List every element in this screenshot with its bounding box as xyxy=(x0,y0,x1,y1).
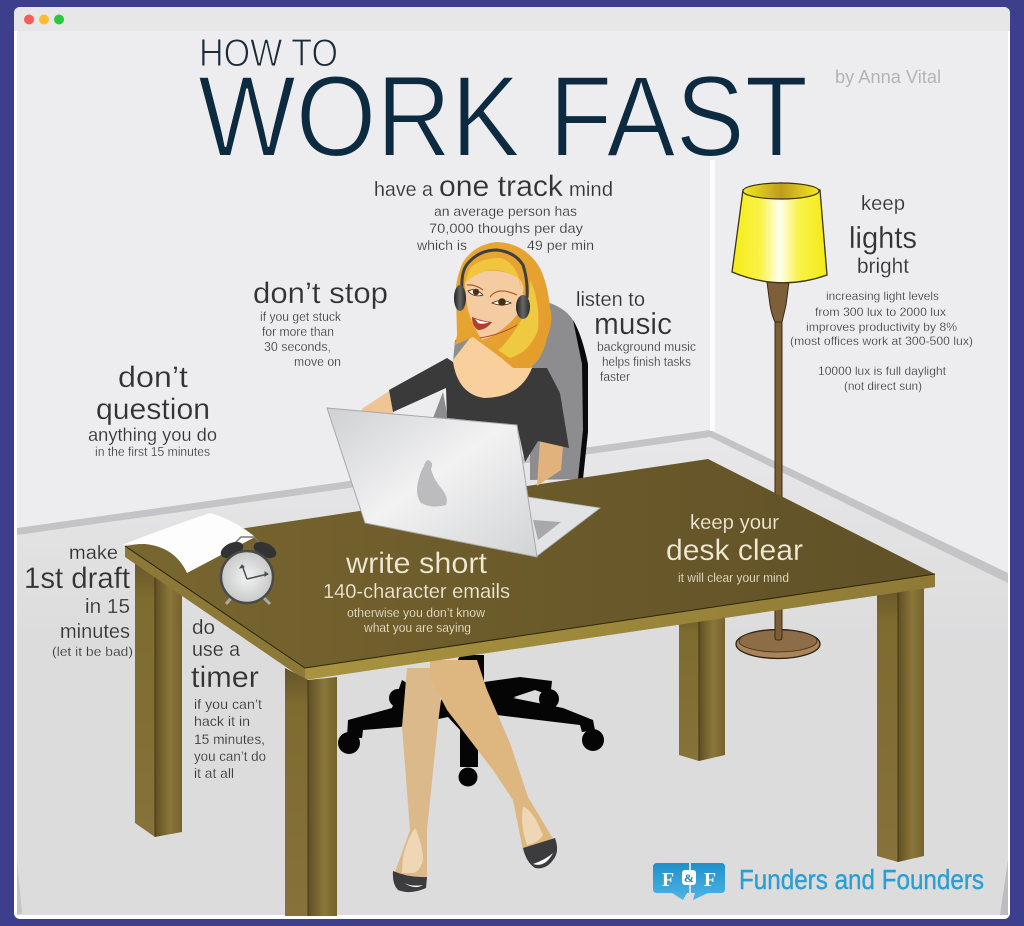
person: fringe xyxy=(465,258,522,292)
person: hair back xyxy=(455,242,551,368)
text block: one track mind: an average person has xyxy=(434,204,577,219)
text block: don't stop: don’t stop xyxy=(253,277,388,310)
window buttons xyxy=(24,14,64,24)
office chair: wheel base xyxy=(338,655,604,786)
person: chest and neck xyxy=(453,322,533,398)
text block: listen to music xyxy=(576,289,696,384)
text block: listen to music: faster xyxy=(600,370,630,384)
text block: don't stop: if you get stuck xyxy=(260,310,342,324)
text block: use a timer: 15 minutes, xyxy=(194,731,265,747)
text block: keep lights bright: from 300 lux to 2000 lux xyxy=(815,305,946,319)
text block: don't question: don’t xyxy=(118,361,189,394)
paper stack xyxy=(122,513,255,573)
text block: make 1st draft: in 15 xyxy=(85,596,130,618)
text block: one track mind: 49 per min xyxy=(527,238,594,253)
text block: make 1st draft xyxy=(24,543,133,659)
text block: keep your desk clear: keep your xyxy=(690,512,779,534)
text block: write short: what you are saying xyxy=(363,620,471,635)
room: walls and floor xyxy=(17,160,1008,915)
text block: one track mind: one track xyxy=(439,170,564,203)
floor lamp xyxy=(732,183,827,658)
office chair: backrest xyxy=(433,303,588,480)
text block: one track mind xyxy=(374,170,613,253)
alarm clock xyxy=(218,537,279,604)
person: eyes and brows xyxy=(467,285,517,306)
text block: write short: 140-character emails xyxy=(323,581,510,603)
text block: make 1st draft: 1st draft xyxy=(24,562,131,595)
text block: keep lights bright: increasing light levels xyxy=(826,289,939,303)
text block: keep lights bright: (not direct sun) xyxy=(844,379,922,393)
text block: listen to music: background music xyxy=(597,340,696,354)
text block: keep lights bright xyxy=(790,193,973,393)
logo: Funders and Founders: Funders and Founders xyxy=(739,864,984,895)
text block: don't question: anything you do xyxy=(88,425,217,445)
text block: don't stop: move on xyxy=(294,355,341,369)
table: top surface xyxy=(125,459,935,668)
text block: don't question xyxy=(88,361,217,459)
text block: use a timer: hack it in xyxy=(194,713,250,729)
text block: write short: otherwise you don’t know xyxy=(347,605,486,620)
text block: keep lights bright: lights xyxy=(849,220,917,255)
text block: keep lights bright: keep xyxy=(861,193,905,215)
logo: Funders and Founders: F xyxy=(704,869,716,891)
table: front leg xyxy=(285,668,337,916)
text block: write short: write short xyxy=(345,547,488,580)
text block: one track mind: have a xyxy=(374,179,434,201)
person: face xyxy=(465,271,523,340)
text block: listen to music: helps finish tasks xyxy=(602,355,691,369)
text block: don't stop xyxy=(253,277,388,369)
text block: one track mind: which is xyxy=(416,238,467,253)
person: headset xyxy=(454,250,530,319)
table: right leg xyxy=(877,580,924,862)
logo: Funders and Founders: F xyxy=(662,869,674,891)
byline: by Anna Vital xyxy=(835,67,941,87)
person: legs xyxy=(395,660,555,880)
text block: don't stop: for more than xyxy=(262,325,334,339)
laptop xyxy=(327,408,600,557)
text block: write short xyxy=(323,547,510,635)
text block: don't stop: 30 seconds, xyxy=(264,340,331,354)
text block: keep your desk clear: desk clear xyxy=(666,534,803,567)
text block: keep lights bright: 10000 lux is full daylight xyxy=(818,364,947,378)
table: edges xyxy=(125,546,935,680)
logo: Funders and Founders xyxy=(653,863,984,900)
table: left leg xyxy=(135,555,182,837)
text block: use a timer: use a xyxy=(192,639,241,661)
person: arms xyxy=(360,391,563,486)
text block: listen to music: music xyxy=(594,306,672,341)
text block: make 1st draft: (let it be bad) xyxy=(52,644,133,659)
text block: keep lights bright: improves productivity by 8% xyxy=(806,320,957,334)
text block: use a timer: timer xyxy=(191,661,259,694)
text block: make 1st draft: minutes xyxy=(60,621,130,643)
text block: one track mind: mind xyxy=(569,179,613,201)
text block: keep lights bright: (most offices work at 300-500 lux) xyxy=(790,334,973,348)
text block: don't question: in the first 15 minutes xyxy=(95,445,210,459)
text block: use a timer: it at all xyxy=(194,765,234,781)
table: far leg xyxy=(679,610,725,761)
text block: use a timer: you can’t do xyxy=(194,748,266,764)
title: WORK FAST xyxy=(198,53,808,181)
person: chin shadow xyxy=(480,325,517,338)
text block: use a timer: do xyxy=(192,617,215,639)
text block: make 1st draft: make xyxy=(69,543,118,564)
text block: use a timer xyxy=(191,617,266,781)
logo: Funders and Founders: & xyxy=(684,871,694,885)
text block: don't question: question xyxy=(96,393,210,426)
person: black top xyxy=(389,358,569,462)
title: HOW TO xyxy=(199,32,338,75)
person: mouth xyxy=(472,317,492,330)
person: shoes xyxy=(393,838,557,892)
text block: keep your desk clear: it will clear your mind xyxy=(678,571,789,585)
icon: pear logo xyxy=(417,460,447,507)
text block: listen to music: listen to xyxy=(576,289,645,311)
text block: use a timer: if you can’t xyxy=(194,696,262,712)
text block: keep your desk clear xyxy=(666,512,803,585)
text block: keep lights bright: bright xyxy=(857,255,909,278)
text block: one track mind: 70,000 thoughs per day xyxy=(429,221,583,236)
